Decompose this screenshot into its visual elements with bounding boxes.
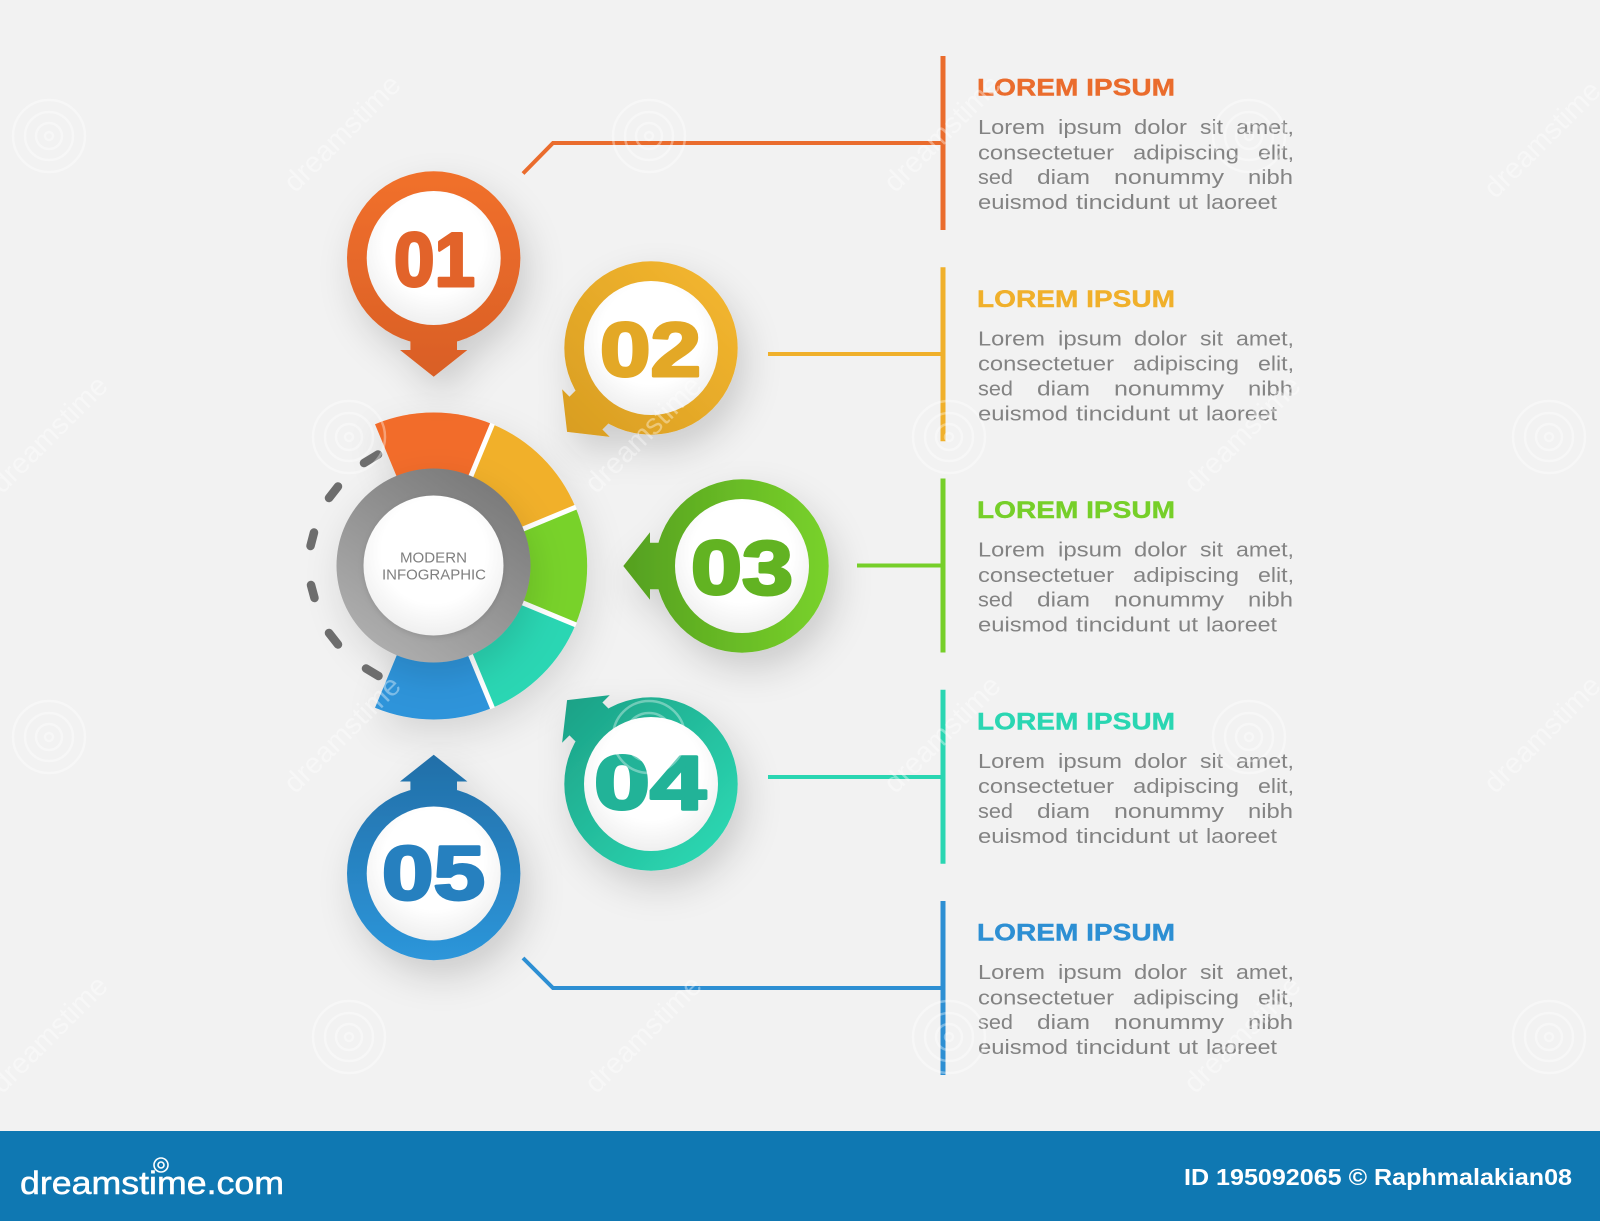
text block 05: consectetuer [978, 986, 1114, 1009]
text block 03: consectetuer [978, 564, 1114, 587]
text block 01: dolor [1134, 116, 1187, 139]
text block 03 [940, 478, 1294, 652]
text block 05: adipiscing [1133, 986, 1239, 1009]
text block 05: sit [1200, 961, 1223, 984]
text block 04: nonummy [1114, 800, 1225, 823]
watermark text: dreamstime [878, 69, 1008, 199]
marker 05: 05 [382, 832, 485, 916]
text block 02: tincidunt [1076, 402, 1170, 425]
text block 05: elit, [1258, 986, 1294, 1009]
text block 05 [940, 901, 1294, 1075]
text block 04: LOREM IPSUM [977, 708, 1175, 735]
central donut chart [336, 413, 587, 719]
text block 02: dolor [1134, 327, 1187, 350]
connector 01 [523, 143, 942, 174]
donut segments [375, 413, 587, 719]
text block 02: nonummy [1114, 377, 1225, 400]
text block 05: Lorem [978, 961, 1045, 984]
text block 01: laoreet [1206, 191, 1277, 214]
watermark text: dreamstime [278, 69, 408, 199]
connector 04 [768, 775, 942, 779]
text block 02: sed [978, 377, 1013, 400]
text block 03: ipsum [1058, 538, 1122, 562]
text block 04: euismod [978, 825, 1068, 848]
connector 02 [768, 352, 942, 356]
text block 03: diam [1037, 588, 1090, 612]
text block 04: tincidunt [1076, 825, 1170, 848]
watermark text: dreamstime [1178, 970, 1308, 1100]
text block 02: sit [1200, 327, 1223, 350]
text block 03: nibh [1248, 588, 1293, 612]
text block 04: ipsum [1058, 750, 1122, 773]
text block 04: elit, [1258, 775, 1294, 798]
watermark text: dreamstime [579, 370, 709, 500]
text block 05: euismod [978, 1036, 1068, 1059]
marker 02: 02 [600, 308, 701, 393]
text block 04: dolor [1134, 750, 1187, 773]
text block 05: nibh [1248, 1011, 1293, 1034]
text block 01: elit, [1258, 141, 1294, 164]
text block 03: laoreet [1206, 614, 1277, 636]
image credit: ID 195092065 © Raphmalakian08 [1184, 1164, 1572, 1190]
text block 03: Lorem [978, 538, 1045, 562]
watermark text: dreamstime [579, 970, 709, 1100]
text block 02: consectetuer [978, 353, 1114, 376]
text block 01: ipsum [1058, 116, 1122, 139]
text block 01 [940, 56, 1294, 230]
text block 02: elit, [1258, 353, 1294, 376]
text block 05: nonummy [1114, 1011, 1225, 1034]
text block 01: sed [978, 166, 1013, 189]
text block 05: amet, [1236, 961, 1294, 984]
text block 05: dolor [1134, 961, 1187, 984]
marker 01: 01 [394, 218, 475, 303]
text block 04: sed [978, 800, 1013, 823]
text block 04: Lorem [978, 750, 1045, 773]
watermark text: dreamstime [878, 670, 1008, 800]
text block 04: diam [1037, 800, 1090, 823]
text block 02: adipiscing [1133, 353, 1239, 376]
text block 02: euismod [978, 402, 1068, 425]
text block 01: sit [1200, 116, 1223, 139]
text block 01: adipiscing [1133, 141, 1239, 164]
connector 05 [523, 958, 942, 988]
text block 02: diam [1037, 377, 1090, 400]
text block 03: sit [1200, 538, 1223, 562]
text block 04: amet, [1236, 750, 1294, 773]
connector 03 [857, 564, 942, 568]
text block 03: amet, [1236, 538, 1294, 562]
dashed arc [310, 454, 378, 676]
text block 05: tincidunt [1076, 1036, 1170, 1059]
text block 02: amet, [1236, 327, 1294, 350]
text block 04: sit [1200, 750, 1223, 773]
marker 04 [506, 639, 774, 907]
marker 03 [623, 479, 829, 653]
text block 01: tincidunt [1076, 191, 1170, 214]
text block 05: ut [1178, 1036, 1198, 1059]
logo spiral icon [154, 1158, 168, 1172]
watermark spirals [13, 100, 1585, 1073]
centre label: MODERN [400, 550, 467, 566]
text block 04 [940, 690, 1294, 864]
segment separators [434, 424, 576, 708]
text block 04: laoreet [1206, 825, 1277, 848]
text block 03: ut [1178, 614, 1198, 636]
text block 02: ipsum [1058, 327, 1122, 350]
text block 04: adipiscing [1133, 775, 1239, 798]
watermark text: dreamstime [1178, 370, 1308, 500]
text block 02: ut [1178, 402, 1198, 425]
text block 05: sed [978, 1011, 1013, 1034]
text block 03: adipiscing [1133, 564, 1239, 587]
centre label [382, 550, 486, 584]
text block 03: sed [978, 588, 1013, 612]
text block 04: nibh [1248, 800, 1293, 823]
text block 05: diam [1037, 1011, 1090, 1034]
text block 01: consectetuer [978, 141, 1114, 164]
text block 02: nibh [1248, 377, 1293, 400]
text block 03: euismod [978, 614, 1068, 636]
text block 02 [940, 267, 1294, 441]
text block 02: LOREM IPSUM [977, 286, 1175, 313]
text block 05: LOREM IPSUM [977, 920, 1175, 946]
text block 05: ipsum [1058, 961, 1122, 984]
text block 02: Lorem [978, 327, 1045, 350]
centre label: INFOGRAPHIC [382, 568, 486, 584]
text block 01: ut [1178, 191, 1198, 214]
logo text: dreamstime.com [20, 1165, 284, 1201]
text block 01: nibh [1248, 166, 1293, 189]
text block 04: ut [1178, 825, 1198, 848]
watermark text: dreamstime [278, 670, 408, 800]
marker 05 [347, 755, 520, 960]
text block 03: tincidunt [1076, 614, 1170, 636]
text block 01: amet, [1236, 116, 1294, 139]
white centre disc [364, 496, 504, 636]
text block 01: euismod [978, 191, 1068, 214]
text block 04: consectetuer [978, 775, 1114, 798]
marker 01 [347, 171, 520, 377]
text block 01: nonummy [1114, 166, 1225, 189]
marker 02 [506, 225, 774, 493]
text block 01: Lorem [978, 116, 1045, 139]
text block 05: laoreet [1206, 1036, 1277, 1059]
footer banner [0, 1131, 1600, 1221]
marker 04: 04 [594, 741, 706, 826]
text block 01: LOREM IPSUM [977, 74, 1175, 102]
grey ring [336, 468, 530, 662]
text block 03: elit, [1258, 564, 1294, 587]
text block 03: nonummy [1114, 588, 1225, 612]
text block 02: laoreet [1206, 402, 1277, 425]
text block 03: LOREM IPSUM [977, 497, 1175, 524]
marker 03: 03 [691, 526, 793, 611]
text block 01: diam [1037, 166, 1090, 189]
text block 03: dolor [1134, 538, 1187, 562]
